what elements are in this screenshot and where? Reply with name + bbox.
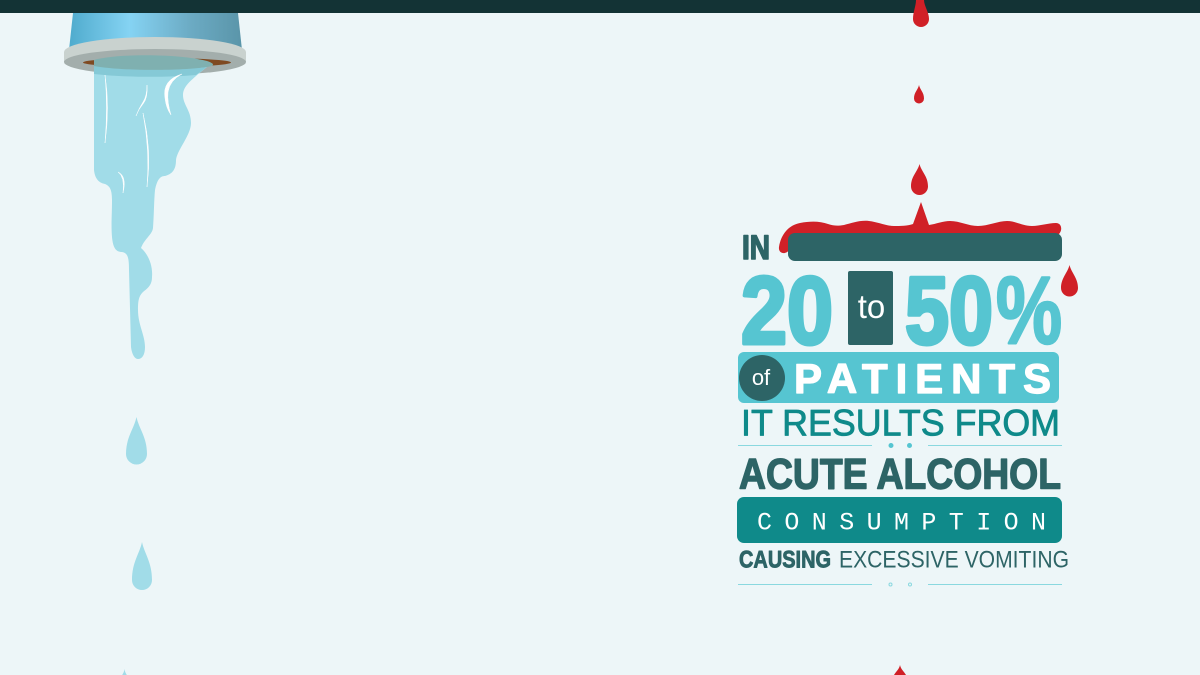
faucet body (69, 13, 242, 50)
text: IN: IN (742, 229, 770, 267)
consumption banner (737, 497, 1062, 543)
icon: blood drop small (914, 85, 924, 104)
icon: water drop 1 (126, 417, 147, 464)
text: causing excessive vomiting: CAUSING (739, 546, 831, 574)
text: 50%: % (996, 258, 1062, 364)
icon: water drop 3 (121, 669, 128, 675)
icon: blood drop right (1061, 265, 1078, 296)
text: it results from: IT RESULTS FROM (741, 402, 1060, 444)
icon: blood stream top (913, 0, 929, 27)
icon: water drop 2 (132, 542, 152, 590)
consumption banner: CONSUMPTION (757, 508, 1046, 538)
top bar (0, 0, 1200, 13)
dark header bar (788, 233, 1062, 261)
patients banner: of (752, 365, 771, 390)
to badge: to (858, 288, 885, 325)
text: acute alcohol: ACUTE ALCOHOL (739, 450, 1061, 498)
text: 20: 20 (741, 258, 833, 364)
water stream (94, 65, 207, 359)
patients banner: PATIENTS (794, 355, 1051, 402)
water over faucet opening (94, 55, 213, 71)
to badge (848, 271, 893, 345)
text: 50% (905, 258, 1062, 364)
icon: blood drop bottom (893, 665, 907, 675)
icon: blood drop medium (911, 164, 928, 195)
text: 50%: 50 (905, 258, 993, 364)
divider with open dots (738, 583, 1062, 586)
text: causing excessive vomiting (739, 546, 1069, 574)
translucent water band (94, 66, 207, 77)
divider with solid dots (738, 443, 1062, 448)
icon: blood spill on bar (779, 202, 1061, 253)
icon: faucet with water stream (64, 13, 246, 359)
water highlights (105, 74, 182, 193)
text: causing excessive vomiting: EXCESSIVE VOMITING (839, 546, 1069, 574)
faucet rim (64, 37, 246, 75)
